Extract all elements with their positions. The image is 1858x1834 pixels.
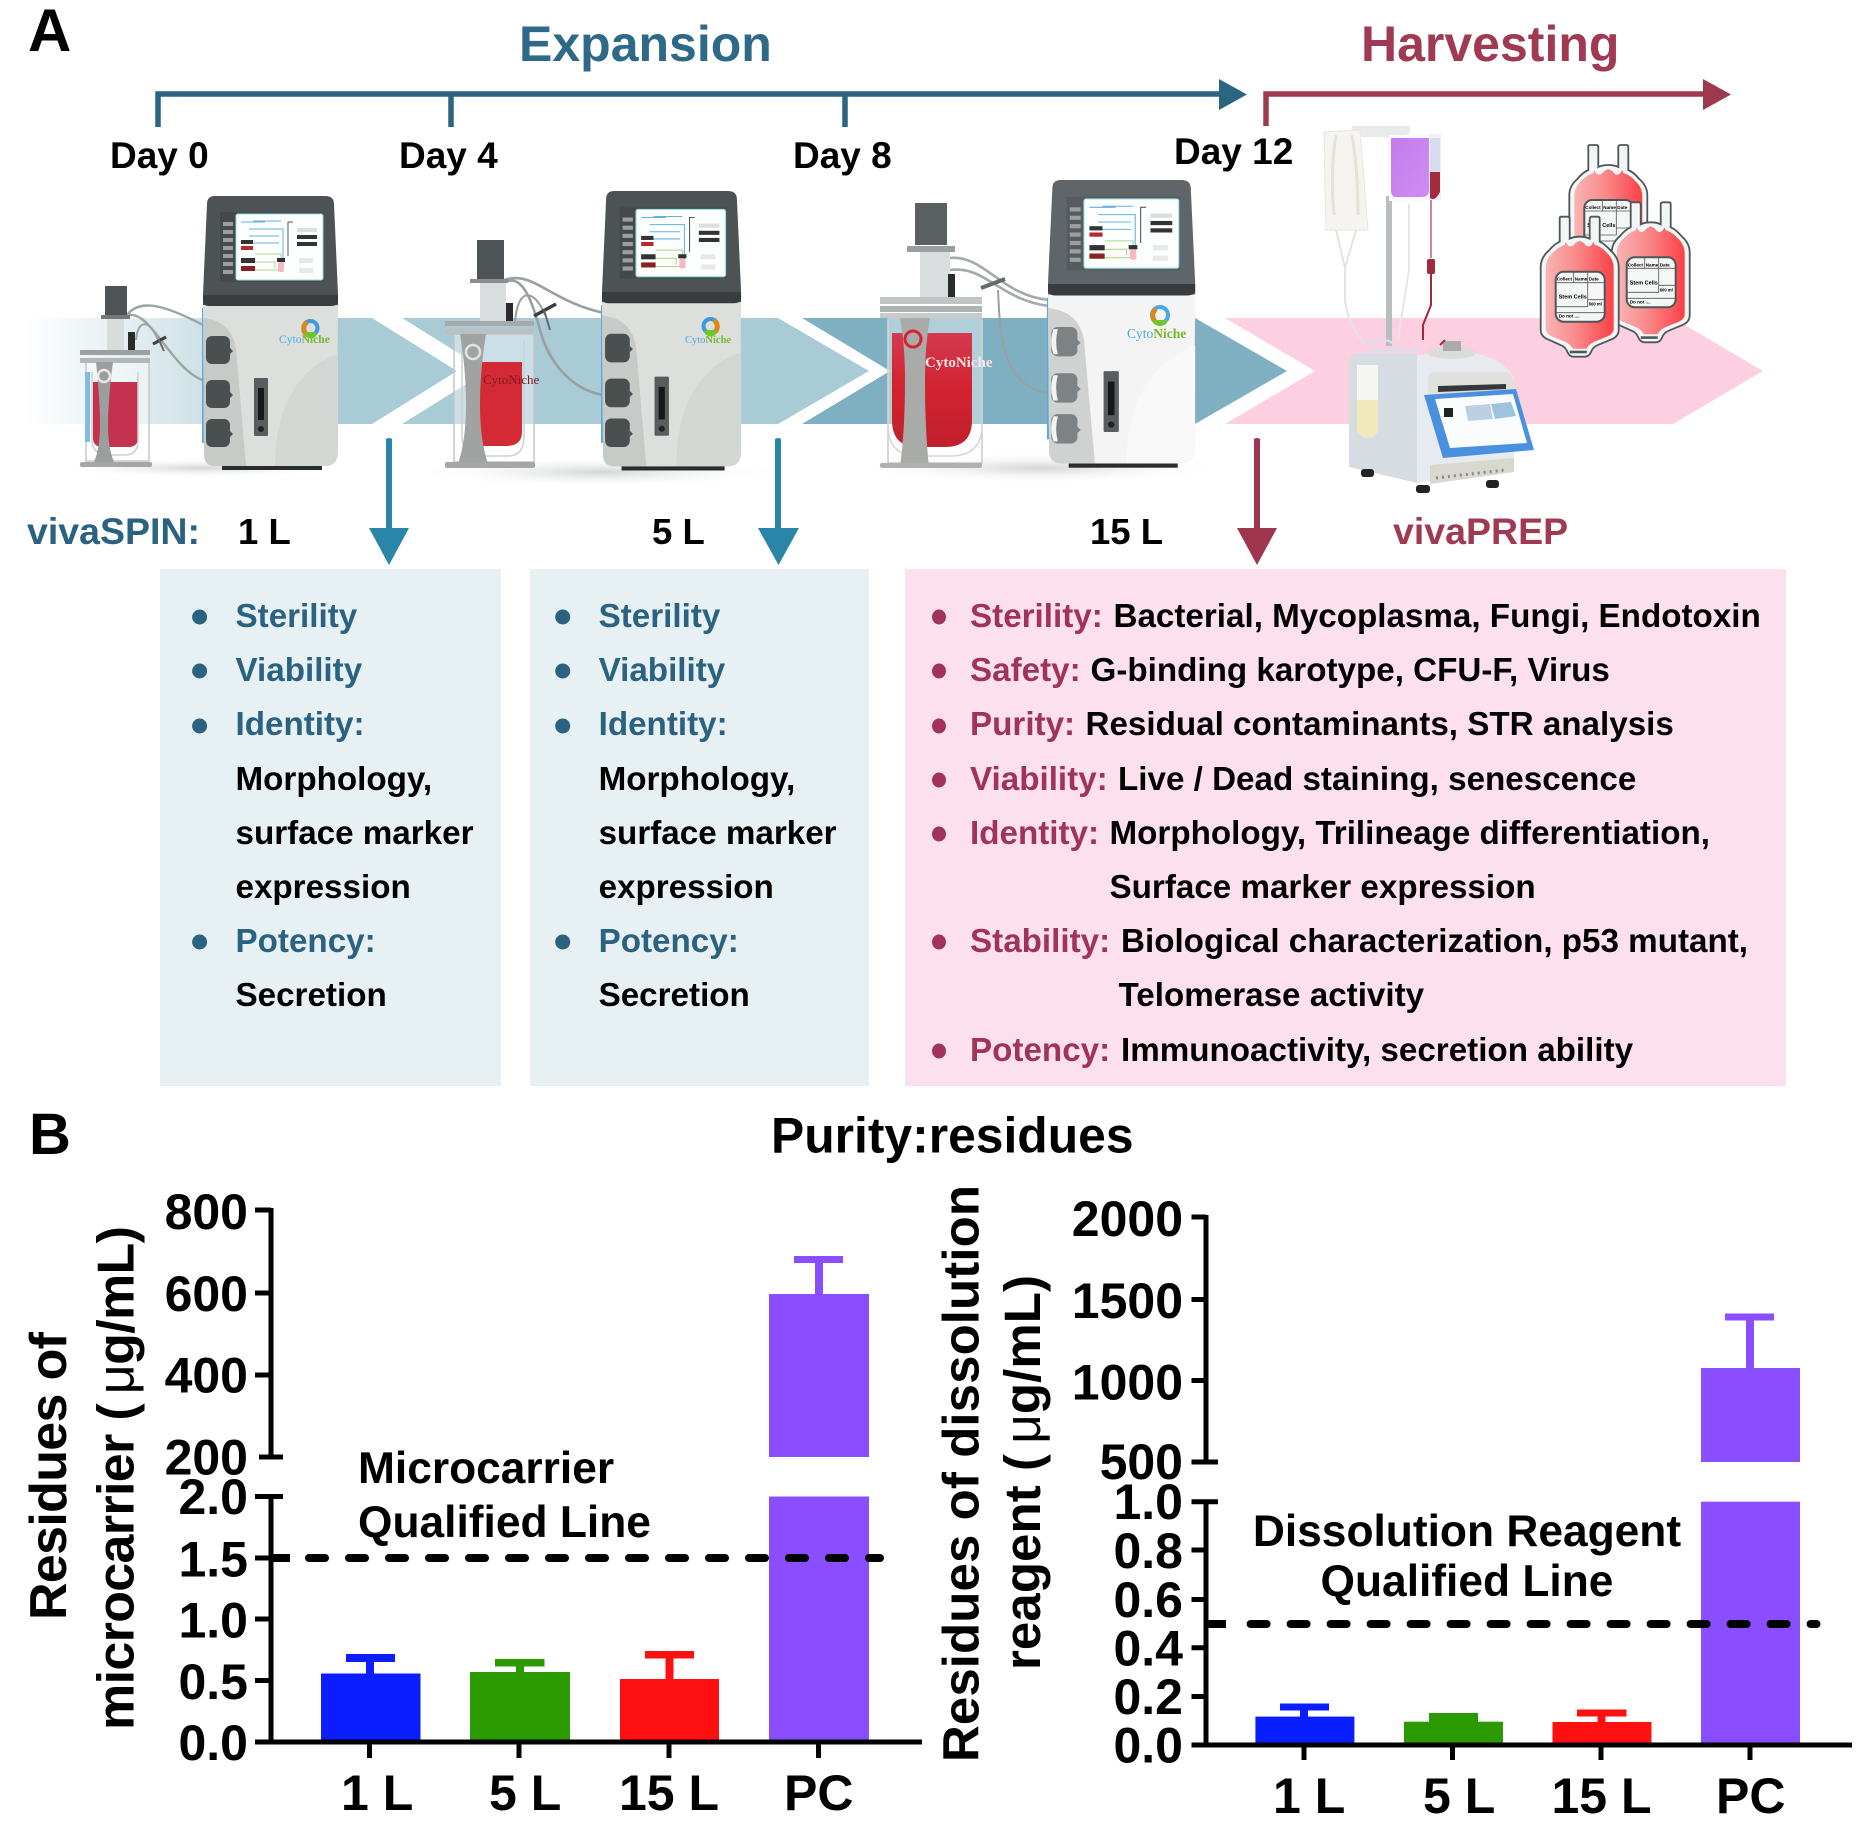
qualified line: dissolution reagent: Dissolution Reagent <box>1253 1507 1681 1556</box>
y axis title: microcarrier <box>20 1226 146 1730</box>
y axis title: microcarrier: Residues of <box>20 1331 78 1620</box>
bioreactor vessel 5 L <box>445 240 604 468</box>
x tick labels: dissolution reagent: PC <box>1716 1768 1785 1824</box>
equipment labels: vivaPREP <box>1393 510 1568 552</box>
panel: 1 L release criteria: Morphology, <box>236 761 432 798</box>
panel: harvest release criteria: Surface marker expression <box>1110 869 1536 906</box>
bioreactor vessel 1 L <box>80 286 205 467</box>
panel: harvest release criteria: Residual contaminants, STR analysis <box>1086 706 1674 743</box>
panel: 5 L release criteria: Secretion <box>599 977 750 1014</box>
panel: harvest release criteria: Live / Dead staining, senescence <box>1118 761 1636 798</box>
x tick labels: microcarrier: 15 L <box>619 1765 719 1821</box>
y tick labels: dissolution reagent: 0.2 <box>1113 1669 1183 1725</box>
y tick labels: dissolution reagent: 1.0 <box>1113 1474 1183 1530</box>
chart: residues of dissolution reagent <box>933 1185 1852 1824</box>
icon: back blood bag: Name <box>1603 205 1616 210</box>
icon: front blood bag: Stem Cells <box>1559 295 1587 301</box>
panel: harvest release criteria: Safety: <box>970 652 1081 689</box>
icon: right blood bag: Do not .... <box>1630 299 1651 304</box>
panel: 1 L release criteria: Sterility <box>236 598 358 635</box>
equipment labels: 5 L <box>652 511 705 552</box>
qualified line: dissolution reagent: Qualified Line <box>1321 1557 1613 1606</box>
logo: CytoNiche on unit 1: CytoNiche <box>279 333 330 346</box>
y tick labels: microcarrier: 1.0 <box>178 1592 248 1648</box>
logo: CytoNiche on unit 2: CytoNiche <box>685 335 731 346</box>
icon: back blood bag: Collect <box>1585 205 1601 210</box>
heading: Expansion: Expansion <box>519 16 772 72</box>
y tick labels: dissolution reagent: 1000 <box>1072 1354 1183 1410</box>
y axis title: dissolution reagent: Residues of dissolution <box>933 1185 990 1762</box>
x tick labels: dissolution reagent: 1 L <box>1273 1768 1345 1824</box>
y tick labels: microcarrier: 800 <box>165 1184 248 1240</box>
x tick labels: microcarrier <box>341 1765 853 1821</box>
day labels: Day 12 <box>1174 131 1293 172</box>
timeline arrow: expansion <box>158 79 1247 127</box>
panel: 1 L release criteria: Potency: <box>236 923 376 960</box>
y tick labels: microcarrier <box>165 1184 248 1771</box>
qualified line: microcarrier <box>271 1444 880 1558</box>
panel label B: B <box>29 1102 71 1167</box>
timeline arrow: harvesting <box>1266 79 1731 126</box>
y axis title: dissolution reagent: reagent ( μg/mL) <box>994 1275 1051 1670</box>
y axis title: microcarrier: microcarrier ( μg/mL) <box>88 1226 146 1730</box>
y tick labels: dissolution reagent: 2000 <box>1072 1191 1183 1247</box>
icon: back blood bag <box>1569 145 1647 285</box>
y tick labels: microcarrier: 600 <box>165 1266 248 1322</box>
day labels: Day 8 <box>793 135 892 176</box>
bioreactor vessel 15 L <box>880 203 1049 468</box>
day labels <box>110 131 1293 176</box>
y tick labels: dissolution reagent: 0.0 <box>1113 1718 1183 1774</box>
heading: Purity residues: Purity:residues <box>771 1108 1134 1164</box>
panel: 5 L release criteria <box>530 569 869 1086</box>
icon: right blood bag: Collect <box>1628 262 1643 267</box>
logo: CytoNiche on unit 1 <box>279 321 330 346</box>
panel: 1 L release criteria: Viability <box>236 652 363 689</box>
day labels: Day 4 <box>399 135 498 176</box>
bars: dissolution reagent <box>1255 1314 1800 1745</box>
vivaPREP harvesting device <box>1324 126 1534 493</box>
icon: right blood bag <box>1612 202 1690 342</box>
panel: harvest release criteria: Identity: <box>970 815 1099 852</box>
y tick labels: dissolution reagent: 0.6 <box>1113 1572 1183 1628</box>
panel: 5 L release criteria: Identity: <box>599 706 728 743</box>
panel: 5 L release criteria: Sterility <box>599 598 721 635</box>
panel: 5 L release criteria: expression <box>599 869 774 906</box>
icon: front blood bag: Name <box>1575 277 1588 282</box>
shadows under equipment <box>50 452 1230 488</box>
bars: microcarrier <box>321 1256 869 1742</box>
chevron band: second expansion stage <box>402 318 869 424</box>
icon: right blood bag: Name <box>1646 262 1659 267</box>
panel: 1 L release criteria <box>160 569 501 1086</box>
y tick labels: microcarrier: 1.5 <box>178 1532 248 1588</box>
x tick labels: dissolution reagent: 5 L <box>1423 1768 1495 1824</box>
qualified line: dissolution reagent <box>1206 1507 1816 1624</box>
arrow down: to 1 L panel <box>369 438 409 565</box>
control unit 5 L <box>601 191 741 470</box>
x tick labels: microcarrier: PC <box>784 1765 853 1821</box>
qualified line: microcarrier: Qualified Line <box>358 1498 651 1547</box>
day labels: Day 0 <box>110 135 209 176</box>
chevron band: first expansion stage <box>25 318 457 424</box>
panel: 5 L release criteria: Viability <box>599 652 726 689</box>
bioreactor vessel 15 L: CytoNiche <box>925 355 993 371</box>
qualified line: microcarrier: Microcarrier <box>358 1444 614 1493</box>
y tick labels: dissolution reagent <box>1072 1191 1183 1774</box>
panel: harvest release criteria: Biological characterization, p53 mutant, <box>1121 923 1748 960</box>
panel: harvest release criteria: Purity: <box>970 706 1075 743</box>
equipment labels: 15 L <box>1090 511 1163 552</box>
icon: right blood bag: Date <box>1660 262 1670 267</box>
x tick labels: microcarrier: 5 L <box>489 1765 561 1821</box>
x tick labels: dissolution reagent: 15 L <box>1552 1768 1652 1824</box>
icon: right blood bag: Stem Cells <box>1630 280 1658 286</box>
panel: harvest release criteria: Viability: <box>970 761 1108 798</box>
y tick labels: microcarrier: 2.0 <box>178 1469 248 1525</box>
icon: back blood bag: Stem Cells <box>1587 223 1615 229</box>
axes: microcarrier <box>255 1208 922 1758</box>
logo: CytoNiche on unit 3: CytoNiche <box>1127 326 1186 341</box>
control unit 1 L <box>202 196 338 470</box>
axes: dissolution reagent <box>1192 1215 1852 1760</box>
icon: front blood bag: Collect <box>1557 277 1572 282</box>
panel: harvest release criteria: Bacterial, Mycoplasma, Fungi, Endotoxin <box>1114 598 1761 635</box>
y axis title: dissolution reagent <box>933 1185 1051 1762</box>
y tick labels: microcarrier: 0.0 <box>178 1715 248 1771</box>
panel: 1 L release criteria: expression <box>236 869 411 906</box>
panel: harvest release criteria: Morphology, Trilineage differentiation, <box>1110 815 1710 852</box>
chevron band: third expansion stage <box>802 318 1287 424</box>
panel: harvest release criteria: Sterility: <box>970 598 1103 635</box>
heading: Harvesting: Harvesting <box>1361 16 1619 72</box>
panel: 5 L release criteria: surface marker <box>599 815 837 852</box>
panel: harvest release criteria: Stability: <box>970 923 1110 960</box>
panel: harvest release criteria: G-binding karotype, CFU-F, Virus <box>1090 652 1610 689</box>
logo: CytoNiche on unit 2 <box>685 319 731 346</box>
chart: residues of microcarrier <box>20 1184 922 1821</box>
panel: 5 L release criteria: Morphology, <box>599 761 795 798</box>
panel: harvest release criteria: Immunoactivity, secretion ability <box>1121 1032 1634 1069</box>
panel: harvest release criteria <box>905 569 1786 1086</box>
x tick labels: dissolution reagent <box>1273 1768 1785 1824</box>
arrow down: to 5 L panel <box>758 438 799 565</box>
y tick labels: dissolution reagent: 500 <box>1100 1434 1183 1490</box>
equipment labels <box>27 510 1568 552</box>
y tick labels: dissolution reagent: 0.8 <box>1113 1523 1183 1579</box>
panel: harvest release criteria: Potency: <box>970 1032 1110 1069</box>
y tick labels: dissolution reagent: 1500 <box>1072 1273 1183 1329</box>
bioreactor vessel 5 L: CytoNiche <box>483 372 540 387</box>
y tick labels: microcarrier: 400 <box>165 1348 248 1404</box>
control unit 15 L <box>1047 180 1195 468</box>
panel: 5 L release criteria: Potency: <box>599 923 739 960</box>
logo: CytoNiche on unit 3 <box>1127 307 1186 341</box>
icon: front blood bag: Date <box>1589 277 1599 282</box>
icon: front blood bag: 600 ml <box>1589 302 1602 307</box>
y tick labels: microcarrier: 200 <box>165 1430 248 1486</box>
icon: right blood bag: 600 ml <box>1660 287 1673 292</box>
icon: back blood bag: Date <box>1617 205 1628 210</box>
icon: front blood bag: Do not .... <box>1559 314 1580 319</box>
panel: 1 L release criteria: Identity: <box>236 706 365 743</box>
panel: harvest release criteria: Telomerase activity <box>1118 977 1425 1014</box>
y tick labels: dissolution reagent: 0.4 <box>1113 1620 1183 1676</box>
arrow down: to harvest panel <box>1237 438 1277 565</box>
y tick labels: microcarrier: 0.5 <box>178 1654 248 1710</box>
chevron band: harvesting stage <box>1225 318 1763 424</box>
equipment labels: vivaSPIN: <box>27 510 200 552</box>
panel: 1 L release criteria: surface marker <box>236 815 474 852</box>
panel: 1 L release criteria: Secretion <box>236 977 387 1014</box>
equipment labels: 1 L <box>238 511 291 552</box>
icon: front blood bag <box>1541 217 1619 357</box>
x tick labels: microcarrier: 1 L <box>341 1765 413 1821</box>
